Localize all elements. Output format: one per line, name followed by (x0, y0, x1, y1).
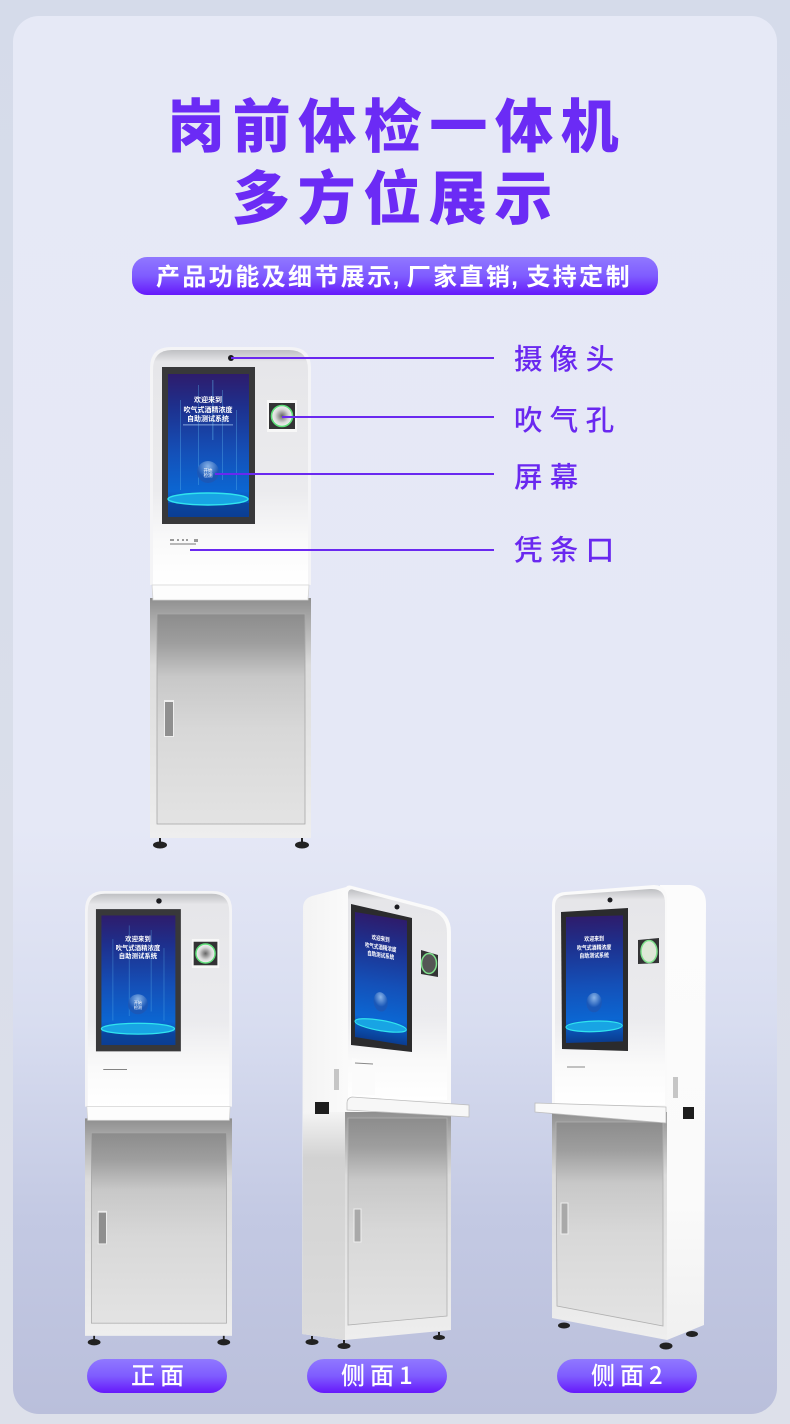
feet (306, 1332, 445, 1349)
screen bezel (561, 908, 628, 1051)
feet (558, 1322, 698, 1350)
label: side 1 (307, 1356, 447, 1393)
card slot (315, 1102, 329, 1114)
right side panel (660, 885, 706, 1340)
label: side 2: 2 (649, 1356, 668, 1391)
label: front: 正面 (131, 1356, 189, 1391)
kiosk lower cabinet (150, 598, 311, 838)
callout labels: 吹气孔 (514, 405, 621, 437)
screen: 检测 (204, 472, 213, 479)
callout labels (514, 344, 621, 567)
callout labels: 凭条口 (514, 535, 621, 567)
screen: 吹气式酒精浓度 (184, 405, 232, 414)
kiosk upper body (150, 347, 311, 585)
front upper (345, 886, 451, 1112)
screen: 欢迎来到 (372, 932, 390, 944)
camera (608, 898, 612, 902)
vent (673, 1077, 678, 1098)
screen: 欢迎来到 (584, 934, 604, 943)
callout labels: 摄像头 (514, 344, 621, 376)
kiosk: front view: 吹气式酒精浓度 (116, 943, 161, 952)
main front kiosk (150, 347, 311, 848)
receipt slot (170, 539, 198, 544)
subtitle pill: 产品功能及细节展示,厂家直销,支持定制 (156, 264, 632, 291)
shelf (535, 1103, 666, 1123)
screen: 自助测试系统 (367, 948, 395, 962)
callout lines (190, 358, 494, 550)
card slot (683, 1107, 694, 1119)
screen: 吹气式酒精浓度 (365, 940, 397, 954)
label: side 1: 侧面 (341, 1356, 399, 1391)
feet (153, 838, 309, 848)
left side panel (302, 886, 352, 1340)
kiosk: front view: 检测 (134, 1004, 142, 1010)
title: 多方位展示 (232, 167, 560, 232)
front lower (345, 1112, 451, 1340)
door handle (354, 1209, 361, 1242)
screen: 吹气式酒精浓度 (577, 943, 612, 952)
vent (334, 1069, 339, 1090)
label: side 2 (557, 1356, 697, 1393)
screen (355, 912, 407, 1046)
screen (566, 915, 623, 1043)
screen: 开始 (204, 467, 213, 474)
label: side 2: 侧面 (591, 1356, 649, 1391)
kiosk: side view 2 (535, 885, 706, 1350)
front lower (552, 1112, 667, 1340)
kiosk: front view: 欢迎来到 (125, 934, 151, 943)
screen (168, 374, 249, 517)
callout labels: 屏幕 (514, 462, 586, 494)
receipt slot (567, 1066, 585, 1068)
title (167, 95, 626, 232)
screen: 自助测试系统 (579, 951, 609, 960)
label: side 1: 1 (399, 1356, 418, 1391)
breath hole (638, 938, 659, 964)
screen bezel (162, 367, 255, 524)
kiosk: front view (85, 891, 232, 1345)
screen: 自助测试系统 (187, 414, 229, 423)
receipt panel (352, 1058, 375, 1095)
screen: 欢迎来到 (194, 395, 222, 404)
camera (394, 904, 400, 910)
breath hole (267, 400, 297, 432)
door handle (164, 700, 174, 737)
kiosk: front view: 自助测试系统 (119, 951, 158, 960)
label: front (87, 1356, 227, 1393)
shelf (152, 585, 309, 600)
title: 岗前体检一体机 (167, 95, 626, 160)
breath hole (421, 950, 438, 977)
kiosk: front view: 开始 (134, 999, 142, 1005)
shelf (347, 1097, 469, 1117)
door handle (561, 1203, 568, 1234)
subtitle pill (132, 257, 658, 295)
screen bezel (351, 904, 412, 1052)
front upper (552, 885, 667, 1112)
kiosk: side view 1 (302, 886, 469, 1349)
camera (228, 355, 234, 361)
